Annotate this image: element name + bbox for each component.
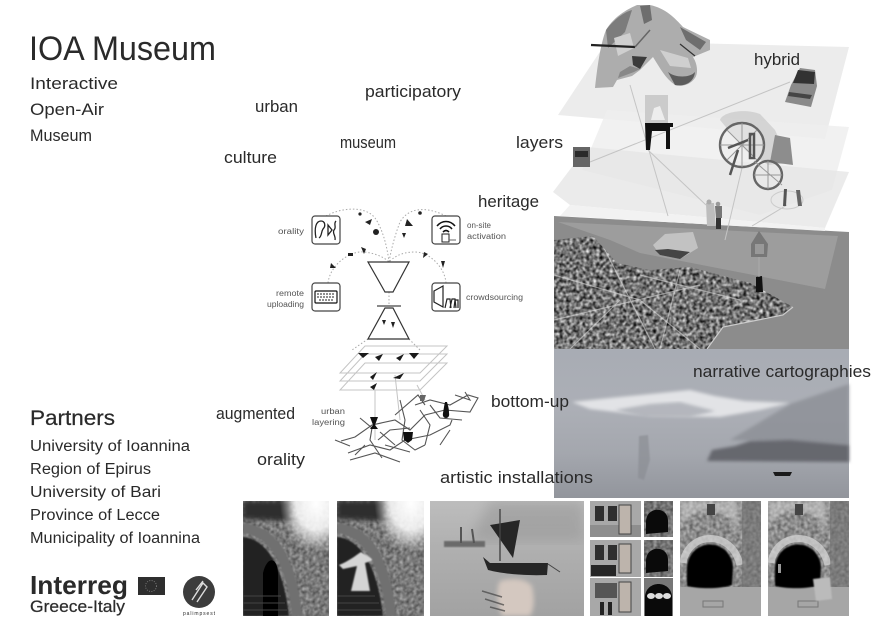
photo: stone tunnel gate xyxy=(680,501,761,616)
keyword labels: participatory xyxy=(365,83,462,101)
urban layer grids xyxy=(340,346,447,440)
heading: partners: Partners xyxy=(30,407,115,430)
keyword labels: museum xyxy=(340,134,396,152)
object: small book xyxy=(573,147,590,167)
photo: stone tunnel gate with figures xyxy=(768,501,849,616)
title: IOA Museum xyxy=(29,30,216,68)
upper funnel xyxy=(368,262,409,292)
keyword labels: hybrid xyxy=(754,51,800,69)
label: urban layering: urban xyxy=(321,407,345,416)
object: hybrid model xyxy=(785,68,817,107)
keyword labels: orality xyxy=(257,451,306,469)
boat xyxy=(773,472,792,476)
partner list: University of Ioannina xyxy=(30,438,190,455)
icon: remote uploading keyboard xyxy=(312,283,340,311)
door photo 2 xyxy=(590,540,641,577)
panel: layered planes xyxy=(553,5,849,240)
connecting lines xyxy=(590,82,790,240)
reflected figure xyxy=(638,435,650,480)
partner list: Municipality of Ioannina xyxy=(30,530,200,547)
panel: aerial city map xyxy=(554,216,849,350)
figure: penny farthing bicycle xyxy=(720,111,793,189)
small house model xyxy=(751,231,768,292)
label: on-site activation: activation xyxy=(467,232,506,241)
icon: orality xyxy=(312,216,340,244)
figures: couple standing xyxy=(706,200,722,229)
label: remote uploading: uploading xyxy=(267,300,304,309)
diagram: participatory flow xyxy=(267,209,523,462)
photo: arch xyxy=(243,501,329,616)
keyword labels: augmented xyxy=(216,405,295,423)
label: remote uploading: remote xyxy=(276,289,305,298)
keyword labels: culture xyxy=(224,149,277,167)
label: on-site activation xyxy=(467,221,506,241)
label: orality: orality xyxy=(278,227,304,236)
subtitle: Interactive Open-Air Museum: Open-Air xyxy=(30,101,105,119)
door photo 3 xyxy=(590,578,641,616)
figure: seated person with picture xyxy=(645,95,673,150)
figures: two people in circle xyxy=(771,189,803,209)
mountain range xyxy=(572,390,790,417)
layer planes xyxy=(553,41,849,231)
keyword labels: urban xyxy=(255,98,298,116)
icon: on-site activation xyxy=(432,216,460,244)
keyword labels: narrative cartographies xyxy=(693,363,871,381)
label: on-site activation: on-site xyxy=(467,221,492,230)
translucent plane over map xyxy=(558,222,838,289)
keyword labels: layers xyxy=(516,134,563,152)
label: urban layering: layering xyxy=(312,418,345,427)
partner list xyxy=(30,438,200,547)
logo: palimpsest: palimpsest xyxy=(183,611,216,617)
partner list: Province of Lecce xyxy=(30,507,160,524)
right hillside xyxy=(730,384,849,445)
icon: crowdsourcing xyxy=(432,283,460,311)
photo sequence: doors and tunnel xyxy=(590,501,673,616)
tunnel photo 1 xyxy=(644,501,673,537)
logo: Interreg Greece-Italy xyxy=(30,570,128,616)
tunnel photo 2 xyxy=(644,540,673,577)
logo: EU flag xyxy=(138,577,165,595)
subtitle: Interactive Open-Air Museum: Interactive xyxy=(30,75,118,93)
subtitle: Interactive Open-Air Museum xyxy=(30,75,118,145)
partner list: University of Bari xyxy=(30,484,161,501)
tunnel photo 3 xyxy=(644,578,673,616)
keyword labels: heritage xyxy=(478,193,539,211)
subtitle: Interactive Open-Air Museum: Museum xyxy=(30,127,92,145)
photo: boat in fog xyxy=(430,501,584,616)
photo: arch with ghost dancer xyxy=(337,501,424,616)
island xyxy=(707,440,849,462)
label: crowdsourcing: crowdsourcing xyxy=(466,293,523,302)
keyword labels: bottom-up xyxy=(491,393,569,411)
urban layering road network xyxy=(335,392,478,462)
partner list: Region of Epirus xyxy=(30,461,151,478)
label: urban layering xyxy=(312,407,345,427)
label: remote uploading xyxy=(267,289,305,309)
keyword labels: artistic installations xyxy=(440,469,593,487)
floating rock xyxy=(653,232,698,259)
logo: Interreg Greece-Italy: Interreg xyxy=(30,570,128,600)
lower funnel xyxy=(368,306,409,339)
shoreline xyxy=(707,307,793,349)
logo: palimpsest xyxy=(183,576,216,617)
logo: Interreg Greece-Italy: Greece-Italy xyxy=(30,597,126,616)
small markers xyxy=(330,211,445,328)
panel: lake and mountains photograph xyxy=(554,349,849,498)
keyword labels xyxy=(216,51,871,487)
layer markers xyxy=(358,353,419,390)
door photo 1 xyxy=(590,501,641,537)
city landmass xyxy=(554,230,799,350)
figure: giant statue xyxy=(591,5,710,88)
network markers xyxy=(370,395,449,443)
dotted arcs xyxy=(326,209,446,350)
